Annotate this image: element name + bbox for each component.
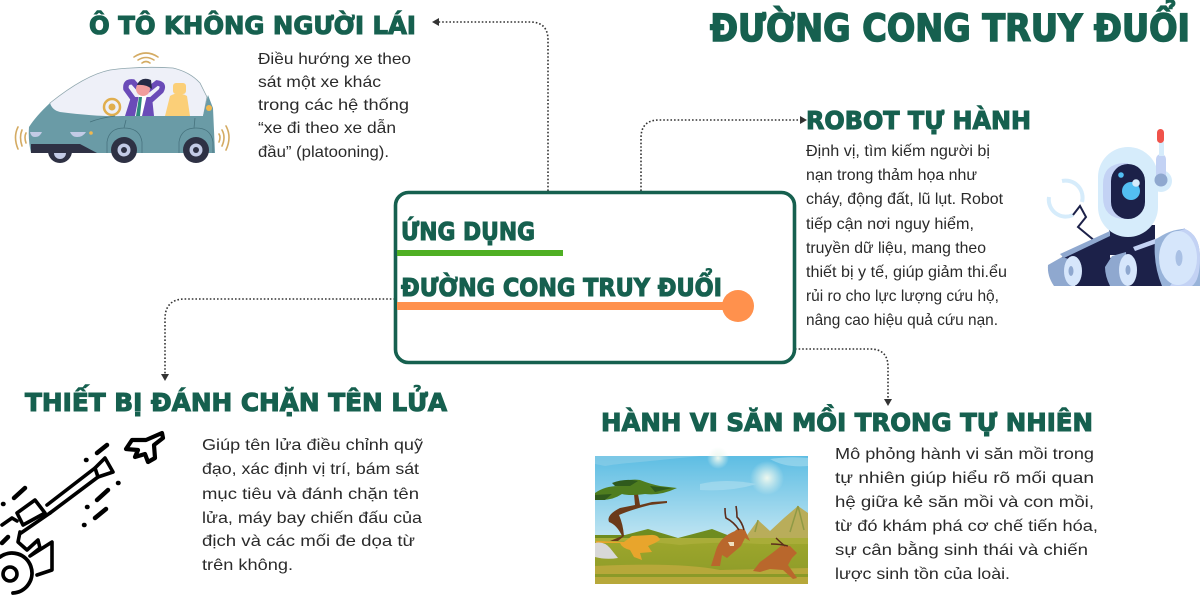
text: lược sinh tồn của loài.	[835, 566, 1010, 583]
text: “xe đi theo xe dẫn	[258, 118, 396, 137]
text: lửa, máy bay chiến đấu của	[202, 510, 422, 527]
text: mục tiêu và đánh chặn tên	[202, 486, 419, 503]
text: nạn trong thảm họa như	[806, 167, 977, 184]
arrow: to predation	[795, 349, 892, 406]
icon: car	[16, 53, 229, 163]
text: sát một xe khác	[258, 74, 381, 91]
illustration: savanna chase	[595, 447, 808, 584]
heading: THIẾT BỊ ĐÁNH CHẶN TÊN LỬA	[25, 384, 448, 417]
text: nâng cao hiệu quả cứu nạn.	[806, 312, 998, 329]
text: từ đó khám phá cơ chế tiến hóa,	[835, 518, 1098, 535]
heading: ROBOT TỰ HÀNH	[806, 106, 1031, 135]
text	[806, 143, 1007, 329]
heading: HÀNH VI SĂN MỒI TRONG TỰ NHIÊN	[601, 404, 1093, 437]
text	[202, 437, 423, 574]
text: trên không.	[202, 557, 293, 574]
text: cháy, động đất, lũ lụt. Robot	[806, 191, 1004, 208]
text: địch và các mối đe dọa từ	[202, 533, 415, 550]
arrow: to robot	[641, 116, 807, 191]
panel: central box	[396, 192, 794, 362]
text: Mô phỏng hành vi săn mồi trong	[835, 446, 1094, 463]
text: Điều hướng xe theo	[258, 51, 411, 68]
panel: predation in nature	[595, 404, 1098, 584]
panel: self-driving car	[16, 10, 416, 163]
text: tự nhiên giúp hiểu rõ mối quan	[835, 469, 1094, 487]
text: hệ giữa kẻ săn mồi và con mồi,	[835, 494, 1094, 511]
heading: pursuit curve: ĐƯỜNG CONG TRUY ĐUỔI	[401, 267, 722, 302]
panel: missile interceptor	[0, 384, 448, 593]
arrow: to missile interceptor	[161, 299, 395, 381]
text: sự cân bằng sinh thái và chiến	[835, 540, 1088, 559]
text: đạo, xác định vị trí, bám sát	[202, 461, 420, 478]
text: Định vị, tìm kiếm người bị	[806, 143, 990, 160]
heading: Ô TÔ KHÔNG NGƯỜI LÁI	[89, 10, 416, 40]
text: thiết bị y tế, giúp giảm thi.ểu	[806, 263, 1007, 281]
arrow: to self-driving car	[432, 18, 548, 191]
orange line with dot	[397, 290, 754, 322]
text: trong các hệ thống	[258, 97, 409, 114]
icon: robot	[1048, 129, 1200, 286]
text	[258, 51, 411, 161]
text: rủi ro cho lực lượng cứu hộ,	[806, 288, 999, 305]
panel: autonomous robot	[806, 106, 1200, 329]
icon: missile launcher	[0, 433, 163, 593]
text: tiếp cận nơi nguy hiểm,	[806, 215, 974, 233]
text: đầu” (platooning).	[258, 144, 389, 161]
text: Giúp tên lửa điều chỉnh quỹ	[202, 437, 423, 454]
text: truyền dữ liệu, mang theo	[806, 240, 986, 257]
green underline	[397, 250, 563, 256]
heading: applications: ỨNG DỤNG	[401, 216, 535, 246]
text	[835, 446, 1098, 583]
